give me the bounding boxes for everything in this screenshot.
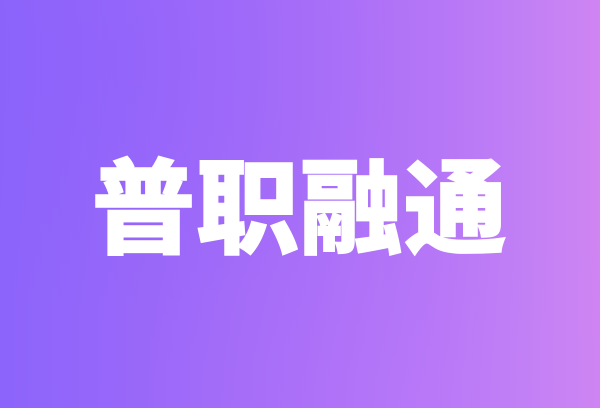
title: 普职融通 [92, 152, 508, 267]
